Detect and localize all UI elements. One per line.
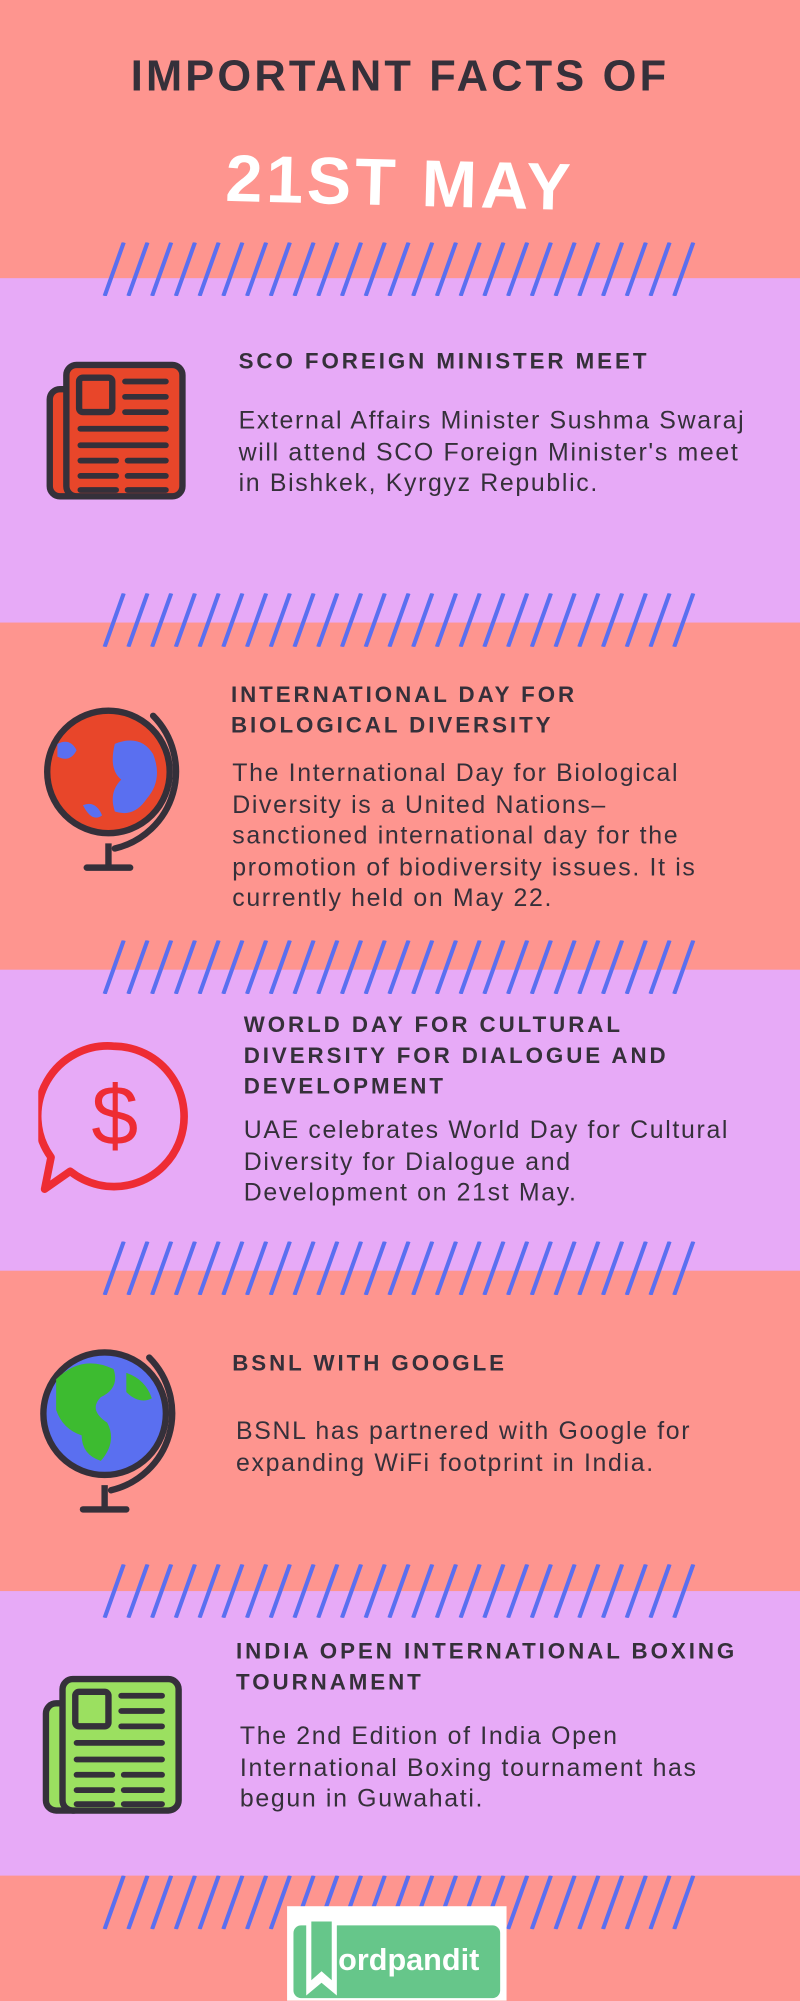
logo: wordpandit <box>287 1906 507 2001</box>
body text: sanctioned international day for the <box>232 822 679 850</box>
icon: green globe <box>40 1349 176 1513</box>
body text: will attend SCO Foreign Minister's meet <box>239 438 739 466</box>
body text: BSNL has partnered with Google for <box>236 1418 691 1446</box>
body text: Diversity is a United Nations– <box>232 790 607 819</box>
body text: The 2nd Edition of India Open <box>240 1722 619 1751</box>
heading <box>244 1012 669 1099</box>
body text: Development on 21st May. <box>244 1179 578 1207</box>
heading <box>231 681 577 737</box>
body text <box>236 1418 691 1477</box>
heading: TOURNAMENT <box>236 1669 424 1694</box>
panel: SCO foreign minister meet <box>0 278 800 623</box>
date heading: 21ST MAY <box>225 142 575 225</box>
body text: in Bishkek, Kyrgyz Republic. <box>239 470 599 498</box>
body text: begun in Guwahati. <box>240 1785 484 1813</box>
title: IMPORTANT FACTS OF <box>131 52 669 101</box>
heading <box>236 1638 737 1694</box>
stripes divider 2 <box>102 593 696 647</box>
body text: The International Day for Biological <box>232 759 679 787</box>
heading: SCO FOREIGN MINISTER MEET <box>239 348 649 374</box>
panel: biological diversity <box>0 623 800 970</box>
body text <box>232 759 697 912</box>
stripes divider 3 <box>102 940 696 994</box>
stripes divider 6 <box>102 1876 696 1930</box>
heading: INDIA OPEN INTERNATIONAL BOXING <box>236 1638 737 1664</box>
body text <box>238 407 745 498</box>
stripes divider 4 <box>102 1242 696 1295</box>
panel: cultural diversity <box>0 970 800 1271</box>
heading: DEVELOPMENT <box>244 1073 446 1099</box>
body text: Diversity for Dialogue and <box>244 1148 572 1176</box>
heading: BIOLOGICAL DIVERSITY <box>231 712 553 737</box>
icon: green newspaper <box>42 1676 182 1814</box>
logo: wordpandit: ordpandit <box>338 1943 479 1978</box>
panel: India open boxing <box>0 1591 800 1876</box>
body text: currently held on May 22. <box>232 884 553 912</box>
heading: BSNL WITH GOOGLE <box>232 1350 507 1375</box>
body text: International Boxing tournament has <box>240 1754 698 1782</box>
header band <box>0 0 800 278</box>
body text <box>240 1722 698 1813</box>
heading: INTERNATIONAL DAY FOR <box>231 681 577 707</box>
body text: expanding WiFi footprint in India. <box>236 1449 655 1477</box>
stripes divider 5 <box>102 1564 696 1618</box>
heading: WORLD DAY FOR CULTURAL <box>244 1012 623 1037</box>
body text: UAE celebrates World Day for Cultural <box>244 1116 729 1145</box>
icon: red newspaper <box>46 362 186 500</box>
body text: promotion of biodiversity issues. It is <box>232 853 697 881</box>
stripes divider 1 <box>102 242 696 296</box>
icon: red globe <box>44 708 180 871</box>
heading: DIVERSITY FOR DIALOGUE AND <box>244 1042 669 1068</box>
icon: dollar speech bubble <box>38 1042 188 1193</box>
body text: External Affairs Minister Sushma Swaraj <box>239 407 745 435</box>
body text <box>244 1116 729 1207</box>
icon: dollar speech bubble: $ <box>91 1069 138 1163</box>
panel: BSNL with Google <box>0 1271 800 1591</box>
